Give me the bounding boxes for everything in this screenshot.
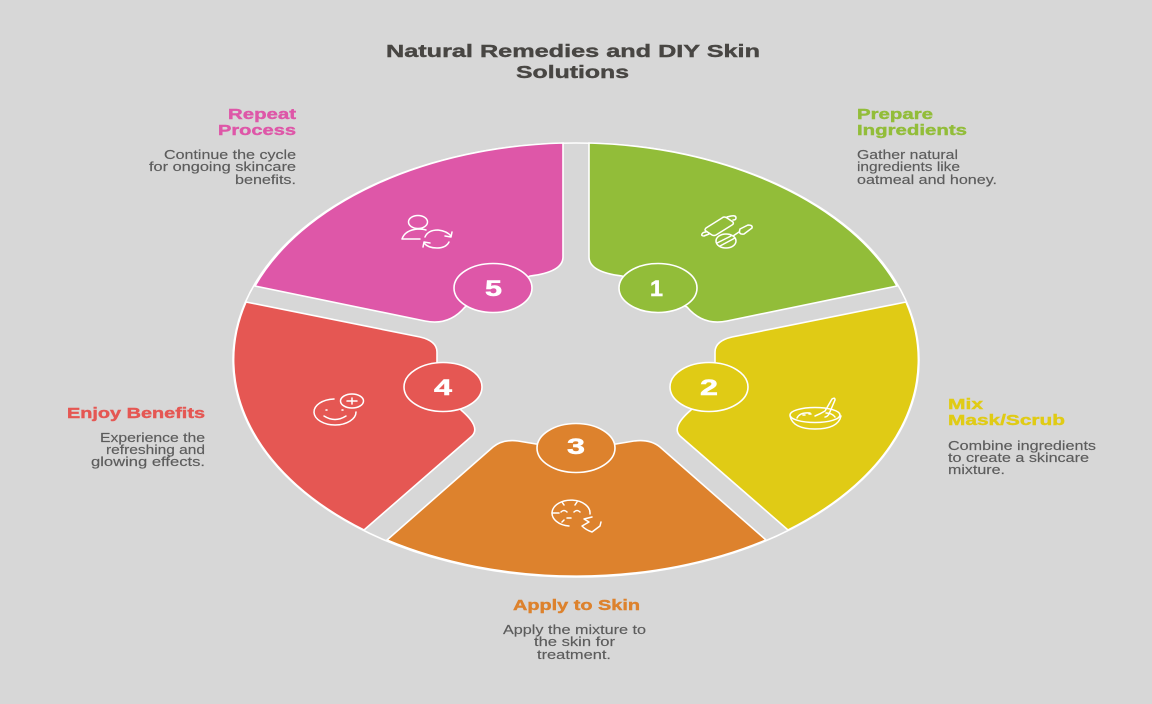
text: mix mask scrub (948, 397, 1096, 477)
text: mix mask scrub: to create a skincare (948, 451, 1089, 465)
text: enjoy benefits: Experience the (100, 431, 205, 445)
text: prepare ingredients: Ingredients (857, 123, 967, 139)
text: prepare ingredients: oatmeal and honey. (857, 173, 997, 187)
text: mix mask scrub: Mask/Scrub (948, 413, 1065, 429)
icon: mixing bowl (790, 398, 841, 429)
text: mix mask scrub: Combine ingredients (948, 439, 1096, 453)
text: repeat process: benefits. (235, 173, 296, 187)
panel: step 1 prepare ingredients (589, 143, 897, 322)
badge 5: 5 (485, 276, 502, 301)
text: repeat process: for ongoing skincare (149, 160, 296, 174)
text: repeat process: Process (218, 123, 296, 139)
text: prepare ingredients: Prepare (857, 107, 933, 123)
icon: person with cycle arrows (402, 216, 452, 248)
badge 1: 1 (650, 276, 663, 301)
badge 2: 2 (700, 375, 718, 400)
text: enjoy benefits: refreshing and (106, 443, 205, 457)
text: prepare ingredients: Gather natural (857, 148, 958, 162)
text: prepare ingredients: ingredients like (857, 160, 960, 174)
panel: step 2 mix mask or scrub (670, 302, 918, 530)
text: apply to skin: the skin for (534, 635, 615, 649)
text: mix mask scrub: Mix (948, 397, 983, 413)
badge 1 (619, 264, 697, 312)
text: repeat process: Continue the cycle (164, 148, 296, 162)
title: Natural Remedies and DIY Skin (386, 41, 760, 61)
text: prepare ingredients (857, 107, 997, 187)
badge 5 (454, 264, 532, 312)
segment 4 (234, 302, 475, 530)
segment 2 (677, 302, 918, 530)
badge 4: 4 (434, 375, 453, 400)
text: enjoy benefits (67, 406, 205, 469)
icon: rolling pin and whisk (702, 216, 752, 248)
segment 5 (255, 143, 563, 322)
text: apply to skin: treatment. (537, 648, 611, 662)
segment 3 (387, 441, 766, 576)
icon: face with applied mask (552, 500, 601, 532)
text: enjoy benefits: Enjoy Benefits (67, 406, 205, 422)
badge 2 (670, 362, 748, 412)
text: apply to skin (503, 598, 646, 662)
text: enjoy benefits: glowing effects. (91, 455, 205, 469)
text: apply to skin: Apply to Skin (513, 598, 640, 614)
badge 3: 3 (567, 434, 585, 459)
text: apply to skin: Apply the mixture to (503, 623, 646, 637)
badge 4 (404, 362, 482, 412)
panel: step 3 apply to skin (387, 424, 766, 576)
title: Solutions (516, 62, 629, 82)
segment 1 (589, 143, 897, 322)
text: mix mask scrub: mixture. (948, 463, 1005, 477)
panel: step 4 enjoy benefits (234, 302, 482, 530)
icon: smiling face with plus (314, 394, 364, 425)
badge 3 (537, 424, 615, 472)
text: repeat process (149, 107, 296, 187)
panel: step 5 repeat process (255, 143, 563, 322)
title (386, 41, 760, 82)
text: repeat process: Repeat (228, 107, 296, 123)
